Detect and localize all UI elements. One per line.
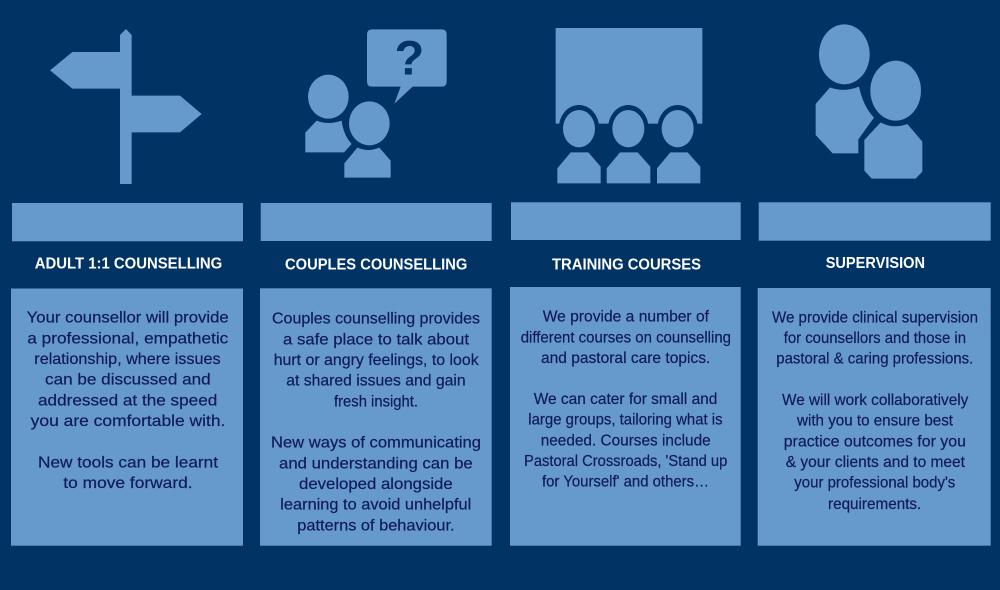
text: supervision description: for counsellors and those in	[784, 330, 966, 347]
person left	[557, 110, 601, 183]
text: supervision description: with you to ensure best	[796, 413, 954, 430]
icon: two people	[816, 24, 922, 179]
text: adult counselling description: addressed at the speed	[38, 392, 217, 409]
column: supervision	[758, 24, 991, 546]
heading bar	[261, 203, 492, 241]
text: training courses description: We provide a number of	[543, 309, 710, 326]
heading bar	[511, 202, 741, 240]
text: supervision description	[772, 309, 978, 513]
text: couples counselling description: learning to avoid unhelpful	[280, 497, 471, 514]
text: adult counselling description: you are comfortable with.	[31, 413, 225, 430]
column: adult counselling	[11, 29, 243, 546]
text: adult counselling description: New tools can be learnt	[38, 454, 219, 471]
text: supervision description: We provide clinical supervision	[772, 309, 978, 326]
text: training courses description: needed. Courses include	[541, 432, 711, 449]
question mark: ?	[394, 32, 424, 86]
icon: audience facing screen	[553, 28, 705, 183]
text: training courses description: for Yourself' and others…	[542, 474, 709, 491]
text: couples counselling description	[271, 311, 481, 534]
panel: supervision	[758, 288, 991, 546]
text: training courses description: We can cater for small and	[534, 391, 717, 408]
text: couples counselling description: patterns of behaviour.	[297, 517, 455, 534]
heading: training courses: TRAINING COURSES	[552, 257, 701, 274]
text: training courses description: large groups, tailoring what is	[528, 412, 723, 429]
heading: adult counselling: ADULT 1:1 COUNSELLING	[35, 256, 222, 273]
text: adult counselling description: relationship, where issues	[34, 351, 221, 368]
panel: adult counselling	[11, 288, 243, 546]
screen	[556, 28, 702, 124]
text: training courses description: different courses on counselling	[521, 329, 731, 346]
text: adult counselling description: Your counsellor will provide	[27, 310, 229, 327]
speech bubble	[367, 29, 447, 104]
text: adult counselling description: a professional, empathetic	[27, 330, 228, 347]
heading: couples counselling: COUPLES COUNSELLING	[285, 257, 467, 274]
head cut-outs	[553, 105, 705, 154]
person two	[344, 101, 391, 178]
text: couples counselling description: New ways of communicating	[271, 435, 481, 452]
panel: training courses	[510, 287, 741, 546]
text: supervision description: pastoral & caring professions.	[776, 351, 973, 368]
person front	[864, 61, 922, 179]
person back	[816, 24, 874, 153]
text: couples counselling description: fresh insight.	[334, 393, 418, 410]
person centre	[607, 110, 650, 183]
text: couples counselling description: at shared issues and gain	[286, 373, 466, 390]
text: training courses description: Pastoral Crossroads, 'Stand up	[524, 453, 727, 470]
text: supervision description: We will work collaboratively	[782, 392, 968, 409]
text: couples counselling description: and understanding can be	[279, 455, 473, 472]
text: supervision description: requirements.	[828, 496, 921, 513]
column: couples counselling	[260, 29, 492, 546]
text: adult counselling description	[27, 310, 229, 492]
icon: couple with speech bubble	[305, 29, 447, 178]
text: couples counselling description: developed alongside	[299, 476, 453, 493]
text: training courses description: and pastoral care topics.	[541, 350, 710, 367]
heading bar	[12, 203, 243, 241]
heading: supervision: SUPERVISION	[826, 255, 925, 272]
person right	[657, 110, 700, 183]
text: adult counselling description: to move forward.	[63, 475, 193, 492]
text: couples counselling description: a safe place to talk about	[283, 331, 470, 348]
text: supervision description: & your clients and to meet	[786, 454, 966, 471]
heading bar	[759, 202, 991, 241]
panel: couples counselling	[260, 288, 492, 546]
text: supervision description: practice outcomes for you	[784, 433, 966, 450]
text: training courses description	[521, 309, 731, 491]
text: adult counselling description: can be discussed and	[45, 372, 211, 389]
text: couples counselling description: Couples counselling provides	[272, 311, 480, 328]
column: training courses	[510, 28, 741, 546]
text: supervision description: your professional body's	[794, 475, 955, 492]
text: couples counselling description: hurt or angry feelings, to look	[274, 352, 480, 369]
icon: signpost	[50, 29, 202, 184]
person one	[305, 75, 352, 152]
